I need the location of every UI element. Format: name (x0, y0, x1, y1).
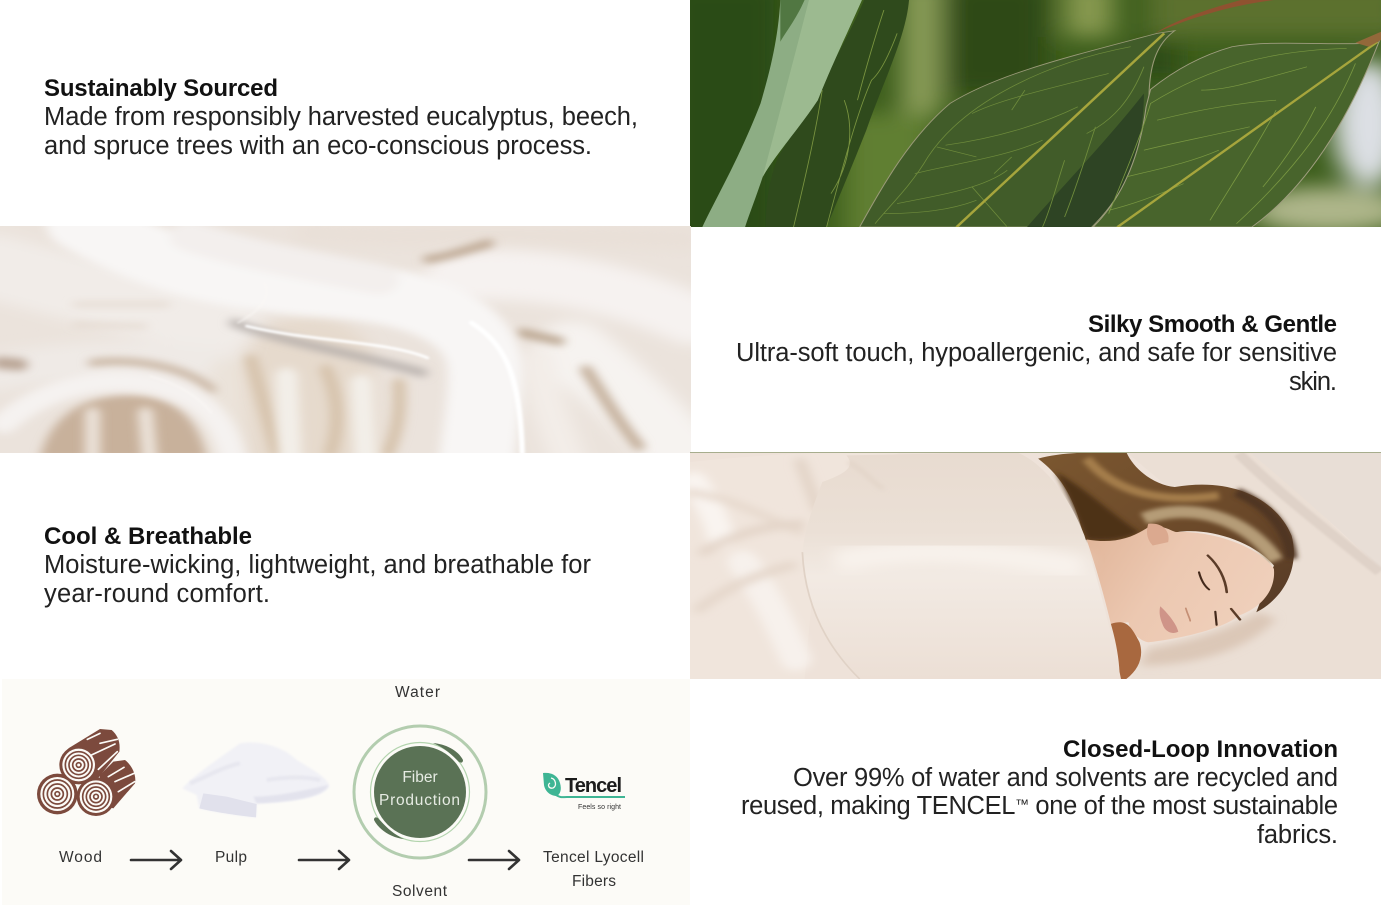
main white fiber bundle (4, 223, 485, 466)
text: sourcing description (44, 103, 638, 160)
heading: silky smooth and gentle: Silky Smooth & Gentle (1088, 311, 1337, 338)
text: softness description: skin. (1289, 368, 1337, 396)
logo: Tencel: Tencel (565, 775, 622, 797)
arrow: production to fibers (469, 851, 519, 869)
heading: sustainably sourced: Sustainably Sourced (44, 75, 278, 102)
panel: closed-loop process diagram (2, 679, 690, 905)
tan shadows (0, 239, 639, 460)
panel: closed-loop innovation text (741, 736, 1338, 849)
label: solvent: Solvent (392, 883, 448, 900)
label: water: Water (395, 684, 440, 701)
label: wood: Wood (59, 849, 102, 866)
icon: pulp pile (184, 743, 329, 818)
label: fiber production (379, 769, 460, 809)
icon: stacked wood logs (37, 729, 136, 816)
text: innovation description (741, 764, 1338, 849)
front leaf (860, 31, 1175, 227)
label: tencel lyocell fibers (543, 849, 644, 890)
panel: sustainably sourced text (44, 75, 638, 160)
text: breathability description (44, 551, 592, 608)
heading: cool and breathable: Cool & Breathable (44, 523, 252, 550)
label: pulp: Pulp (215, 849, 247, 866)
text: innovation description: ™ (1015, 796, 1029, 812)
label: fiber production: Fiber (402, 769, 438, 786)
facial features (1186, 555, 1240, 625)
logo: Tencel (543, 773, 625, 811)
dark back leaf (766, 0, 909, 227)
hair (1038, 452, 1294, 612)
heading: closed-loop innovation: Closed-Loop Innovation (1063, 736, 1338, 763)
photo: white lyocell fibers (0, 226, 691, 453)
soft background tones (0, 233, 692, 466)
text: innovation description: Over 99% of water and solvents are recycled and (793, 764, 1338, 792)
text: softness description (736, 339, 1337, 396)
text: innovation description: reused, making TENCEL (741, 792, 1015, 820)
diagram: fiber production circle (354, 726, 486, 858)
text: sourcing description: Made from responsibly harvested eucalyptus, beech, (44, 103, 638, 131)
text: breathability description: Moisture-wicking, lightweight, and breathable for (44, 551, 592, 579)
arrow: pulp to production (299, 851, 349, 869)
front duvet (802, 452, 1121, 679)
label: tencel lyocell fibers: Fibers (572, 873, 616, 890)
panel: silky smooth text (736, 311, 1337, 396)
label: fiber production: Production (379, 792, 460, 809)
panel: cool and breathable text (44, 523, 592, 608)
text: breathability description: year-round comfort. (44, 580, 270, 608)
back duvet (690, 452, 902, 679)
text: innovation description: one of the most sustainable (1029, 792, 1338, 820)
text: softness description: Ultra-soft touch, hypoallergenic, and safe for sensitive (736, 339, 1337, 367)
photo: woman sleeping under beige bedding (690, 452, 1381, 679)
label: tencel lyocell fibers: Tencel Lyocell (543, 849, 644, 866)
text: innovation description: fabrics. (1257, 821, 1338, 849)
pale leaf (702, 0, 862, 227)
back right leaf (1093, 40, 1380, 227)
arrow: wood to pulp (131, 851, 181, 869)
pillows (1126, 452, 1381, 679)
logo: Tencel: Feels so right (578, 804, 621, 811)
face, neck and chest (1087, 526, 1274, 642)
fine fiber highlights (150, 283, 522, 453)
text: sourcing description: and spruce trees with an eco-conscious process. (44, 132, 592, 160)
leaf midribs (957, 33, 1377, 227)
reddish stem (1155, 0, 1274, 33)
photo: eucalyptus leaves (690, 0, 1381, 227)
